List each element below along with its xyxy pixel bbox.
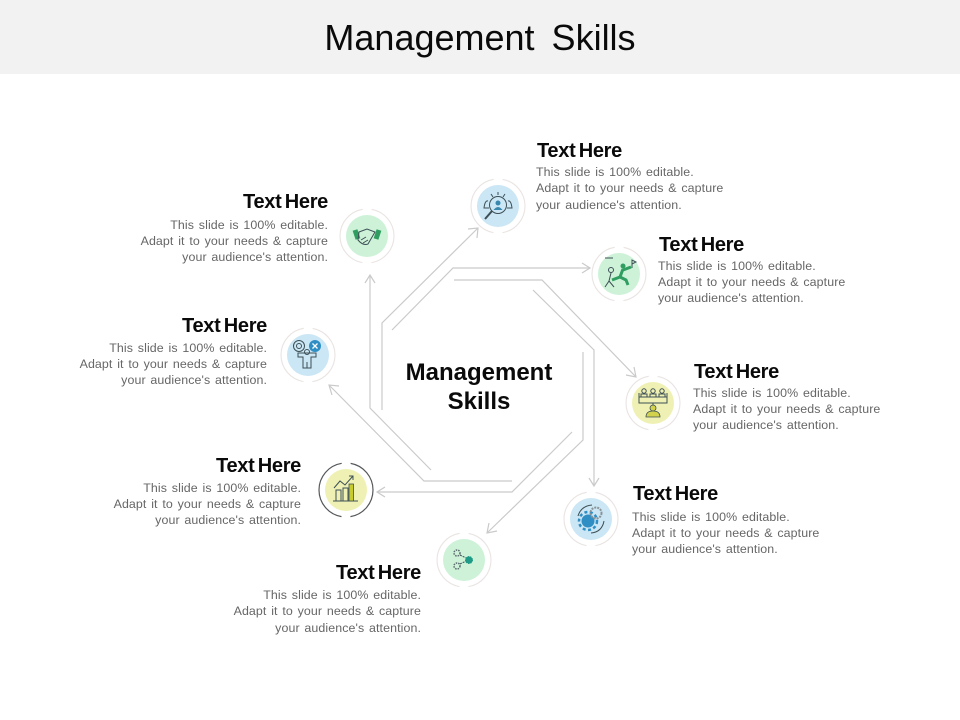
text block: This slide is 100% editable.: [263, 588, 421, 602]
item: person search: [471, 140, 723, 233]
text block: [80, 315, 267, 387]
text block: Text Here: [537, 140, 622, 162]
text block: [234, 562, 421, 635]
arrow: to climbing: [392, 263, 590, 330]
text block: Text Here: [694, 361, 779, 383]
item: chart: [114, 455, 373, 527]
text block: Adapt it to your needs & capture: [114, 497, 301, 511]
title: Management Skills: [324, 17, 636, 58]
text block: your audience's attention.: [536, 198, 682, 212]
text block: your audience's attention.: [182, 250, 328, 264]
text block: your audience's attention.: [155, 513, 301, 527]
text block: your audience's attention.: [632, 542, 778, 556]
text block: [114, 455, 301, 527]
text block: Text Here: [659, 234, 744, 256]
item: meeting: [626, 361, 880, 432]
text block: Text Here: [336, 562, 421, 584]
icon: handshake: [340, 209, 394, 263]
text block: your audience's attention.: [121, 373, 267, 387]
arrow: to chart: [377, 432, 572, 497]
text block: This slide is 100% editable.: [170, 218, 328, 232]
center label: Management: [406, 359, 552, 386]
item: gear: [564, 483, 819, 556]
item: climbing: [592, 234, 845, 305]
arrow: to connected gears: [487, 352, 583, 533]
text block: [693, 361, 880, 432]
text block: your audience's attention.: [275, 621, 421, 635]
header band: [0, 0, 960, 74]
text block: Text Here: [216, 455, 301, 477]
arrow: to target: [329, 385, 512, 481]
text block: Adapt it to your needs & capture: [693, 402, 880, 416]
icon: meeting table: [626, 376, 680, 430]
text block: Adapt it to your needs & capture: [658, 275, 845, 289]
icon: climbing figures: [592, 247, 646, 301]
center label: Skills: [448, 388, 510, 415]
text block: [141, 191, 328, 264]
text block: Text Here: [243, 191, 328, 213]
text block: This slide is 100% editable.: [109, 341, 267, 355]
text block: Adapt it to your needs & capture: [80, 357, 267, 371]
center label: [406, 359, 552, 415]
text block: This slide is 100% editable.: [658, 259, 816, 273]
text block: This slide is 100% editable.: [143, 481, 301, 495]
text block: This slide is 100% editable.: [536, 165, 694, 179]
text block: your audience's attention.: [658, 291, 804, 305]
text block: your audience's attention.: [693, 418, 839, 432]
icon: connected gears: [437, 533, 491, 587]
item: handshake: [141, 191, 394, 264]
arrow: to meeting: [454, 280, 636, 377]
arrow: to gear: [533, 290, 599, 486]
icon: growth chart: [319, 463, 373, 517]
text block: Adapt it to your needs & capture: [141, 234, 328, 248]
item: target: [80, 315, 335, 387]
text block: Text Here: [633, 483, 718, 505]
icon: person weighing target and cross: [281, 328, 335, 382]
text block: Adapt it to your needs & capture: [632, 526, 819, 540]
text block: Text Here: [182, 315, 267, 337]
text block: [632, 483, 819, 556]
text block: [536, 140, 723, 212]
arrow: to person search: [382, 228, 478, 410]
text block: This slide is 100% editable.: [693, 386, 851, 400]
icon: magnifier with people: [471, 179, 525, 233]
text block: Adapt it to your needs & capture: [536, 181, 723, 195]
icon: rotating gears: [564, 492, 618, 546]
item: connected gears: [234, 533, 491, 635]
text block: Adapt it to your needs & capture: [234, 604, 421, 618]
text block: [658, 234, 845, 305]
arrow: to handshake: [365, 275, 431, 470]
text block: This slide is 100% editable.: [632, 510, 790, 524]
